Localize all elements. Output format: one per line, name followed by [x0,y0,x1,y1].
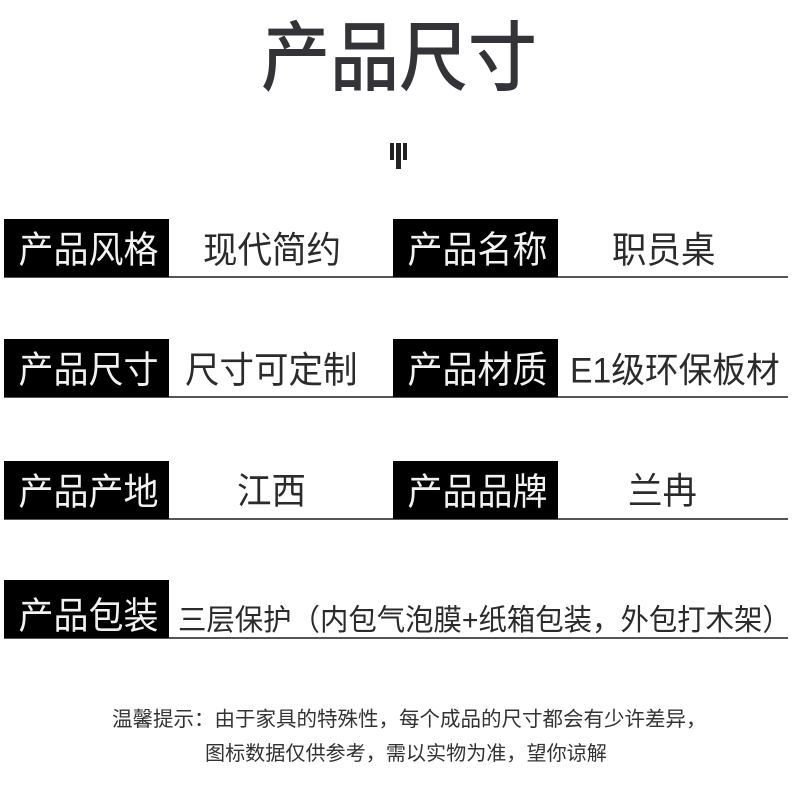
row 2: size and material [4,339,788,398]
icon: three vertical bars [390,143,407,169]
label: 产品品牌 [393,461,558,519]
value: E1级环保板材: E1级环保板材 [570,351,780,391]
label: 产品风格 [4,219,169,277]
footnote: 温馨提示：由于家具的特殊性，每个成品的尺寸都会有少许差异， [112,708,706,731]
footnote [112,708,706,765]
row 4: packaging [4,580,791,639]
label: 产品名称: 产品名称 [407,230,548,271]
label: 产品包装: 产品包装 [18,596,158,637]
value: 尺寸可定制: 尺寸可定制 [185,351,358,391]
footnote: 图标数据仅供参考，需以实物为准，望你谅解 [205,743,607,765]
value: 江西: 江西 [237,472,306,512]
label: 产品包装 [4,580,169,638]
label: 产品材质 [393,339,558,397]
label: 产品尺寸: 产品尺寸 [18,350,158,391]
label: 产品尺寸 [4,339,169,397]
label: 产品产地: 产品产地 [18,472,158,513]
label: 产品材质: 产品材质 [407,350,548,391]
value: 兰冉: 兰冉 [628,472,697,512]
title: 产品尺寸 [261,16,537,101]
row 3: origin and brand [4,461,788,520]
label: 产品品牌: 产品品牌 [407,472,548,513]
row 1: style and name [4,219,788,278]
label: 产品产地 [4,461,169,519]
label: 产品名称 [393,219,558,277]
value: 职员桌: 职员桌 [612,231,716,271]
value: packaging description: 三层保护（内包气泡膜+纸箱包装，外包打木架） [178,604,791,637]
value: 现代简约: 现代简约 [203,231,341,271]
label: 产品风格: 产品风格 [18,230,158,271]
